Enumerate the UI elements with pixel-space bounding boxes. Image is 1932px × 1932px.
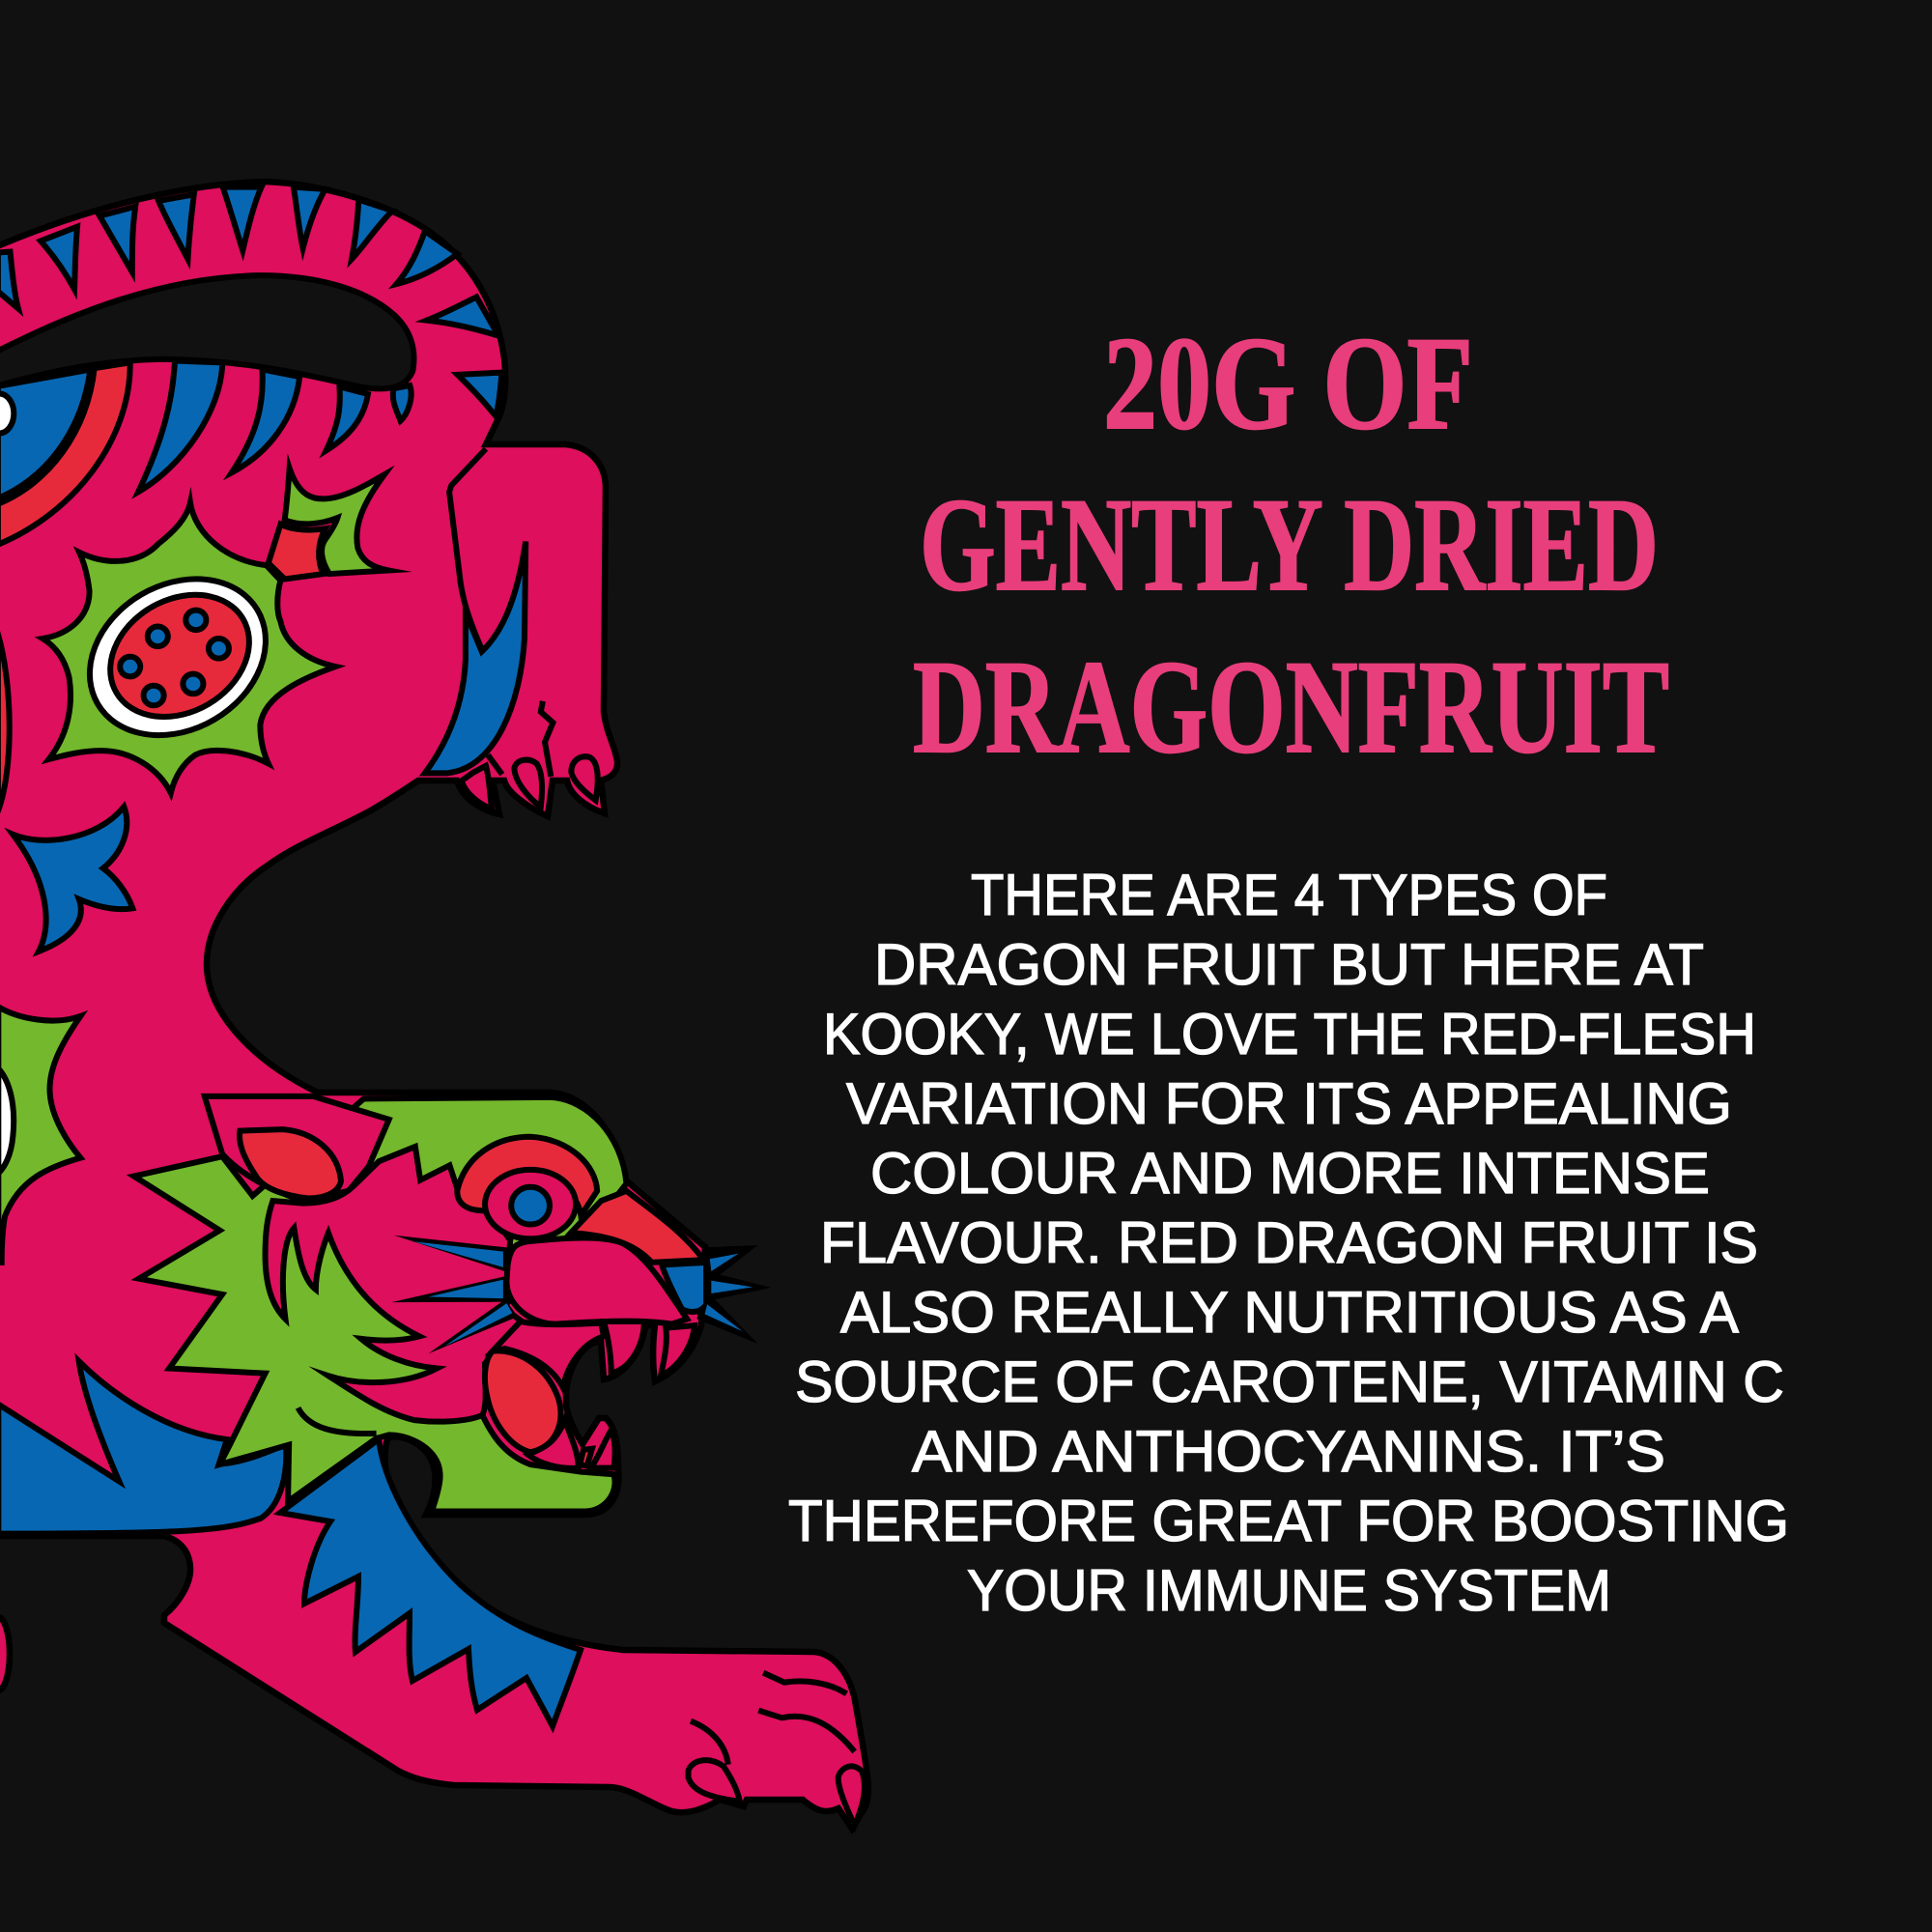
small toe at left edge	[0, 1617, 10, 1690]
belly crescent at left edge	[0, 635, 10, 811]
mouth, teeth and cheek	[485, 1321, 695, 1468]
green belly flower	[0, 1007, 80, 1263]
leaf on flower	[269, 469, 388, 579]
face	[266, 1147, 526, 1422]
title: DRAGONFRUIT	[913, 633, 1669, 781]
tiger head	[134, 1096, 772, 1511]
body text: THEREFORE GREAT FOR BOOSTING	[788, 1489, 1789, 1553]
flank stripes	[0, 361, 412, 545]
blue belly flower	[13, 807, 132, 952]
eye-shaped cutout in the tail	[0, 275, 413, 388]
body text: ALSO REALLY NUTRITIOUS AS A	[840, 1280, 1739, 1345]
jaw mane line	[298, 1407, 377, 1434]
body text: FLAVOUR. RED DRAGON FRUIT IS	[820, 1210, 1758, 1275]
body text: KOOKY, WE LOVE THE RED-FLESH	[823, 1002, 1756, 1066]
hanging arm details	[425, 449, 598, 809]
title	[913, 309, 1669, 781]
body text: DRAGON FRUIT BUT HERE AT	[874, 932, 1704, 997]
title: 20G OF	[1103, 309, 1473, 457]
right whisker tips	[697, 1245, 772, 1344]
body text: VARIATION FOR ITS APPEALING	[846, 1071, 1732, 1136]
illustration: tiger dragon creature	[0, 182, 868, 1829]
hind paw claws and toes	[689, 1673, 865, 1826]
body text	[788, 863, 1789, 1623]
body text: SOURCE OF CAROTENE, VITAMIN C	[795, 1350, 1784, 1414]
green mane and jaw	[134, 1097, 626, 1511]
eye	[457, 1137, 597, 1238]
body text: THERE ARE 4 TYPES OF	[971, 863, 1607, 927]
title: GENTLY DRIED	[920, 470, 1659, 618]
lower belly details	[0, 807, 286, 1534]
left whisker tips	[391, 1236, 518, 1353]
body text: COLOUR AND MORE INTENSE	[870, 1141, 1710, 1206]
blue hind leg stripe	[280, 1439, 581, 1726]
white fruit edge	[0, 1068, 14, 1174]
body silhouette	[0, 182, 868, 1829]
ear	[205, 1096, 389, 1201]
shoulder flower with fruit	[43, 502, 335, 793]
blue haunch band	[0, 1361, 286, 1534]
body text: AND ANTHOCYANINS. IT’S	[912, 1419, 1665, 1484]
upper back and shoulder details	[0, 187, 598, 811]
back spikes	[0, 187, 501, 416]
body text: YOUR IMMUNE SYSTEM	[967, 1558, 1611, 1623]
muzzle and nose	[506, 1191, 706, 1324]
whiskers	[414, 1241, 753, 1347]
